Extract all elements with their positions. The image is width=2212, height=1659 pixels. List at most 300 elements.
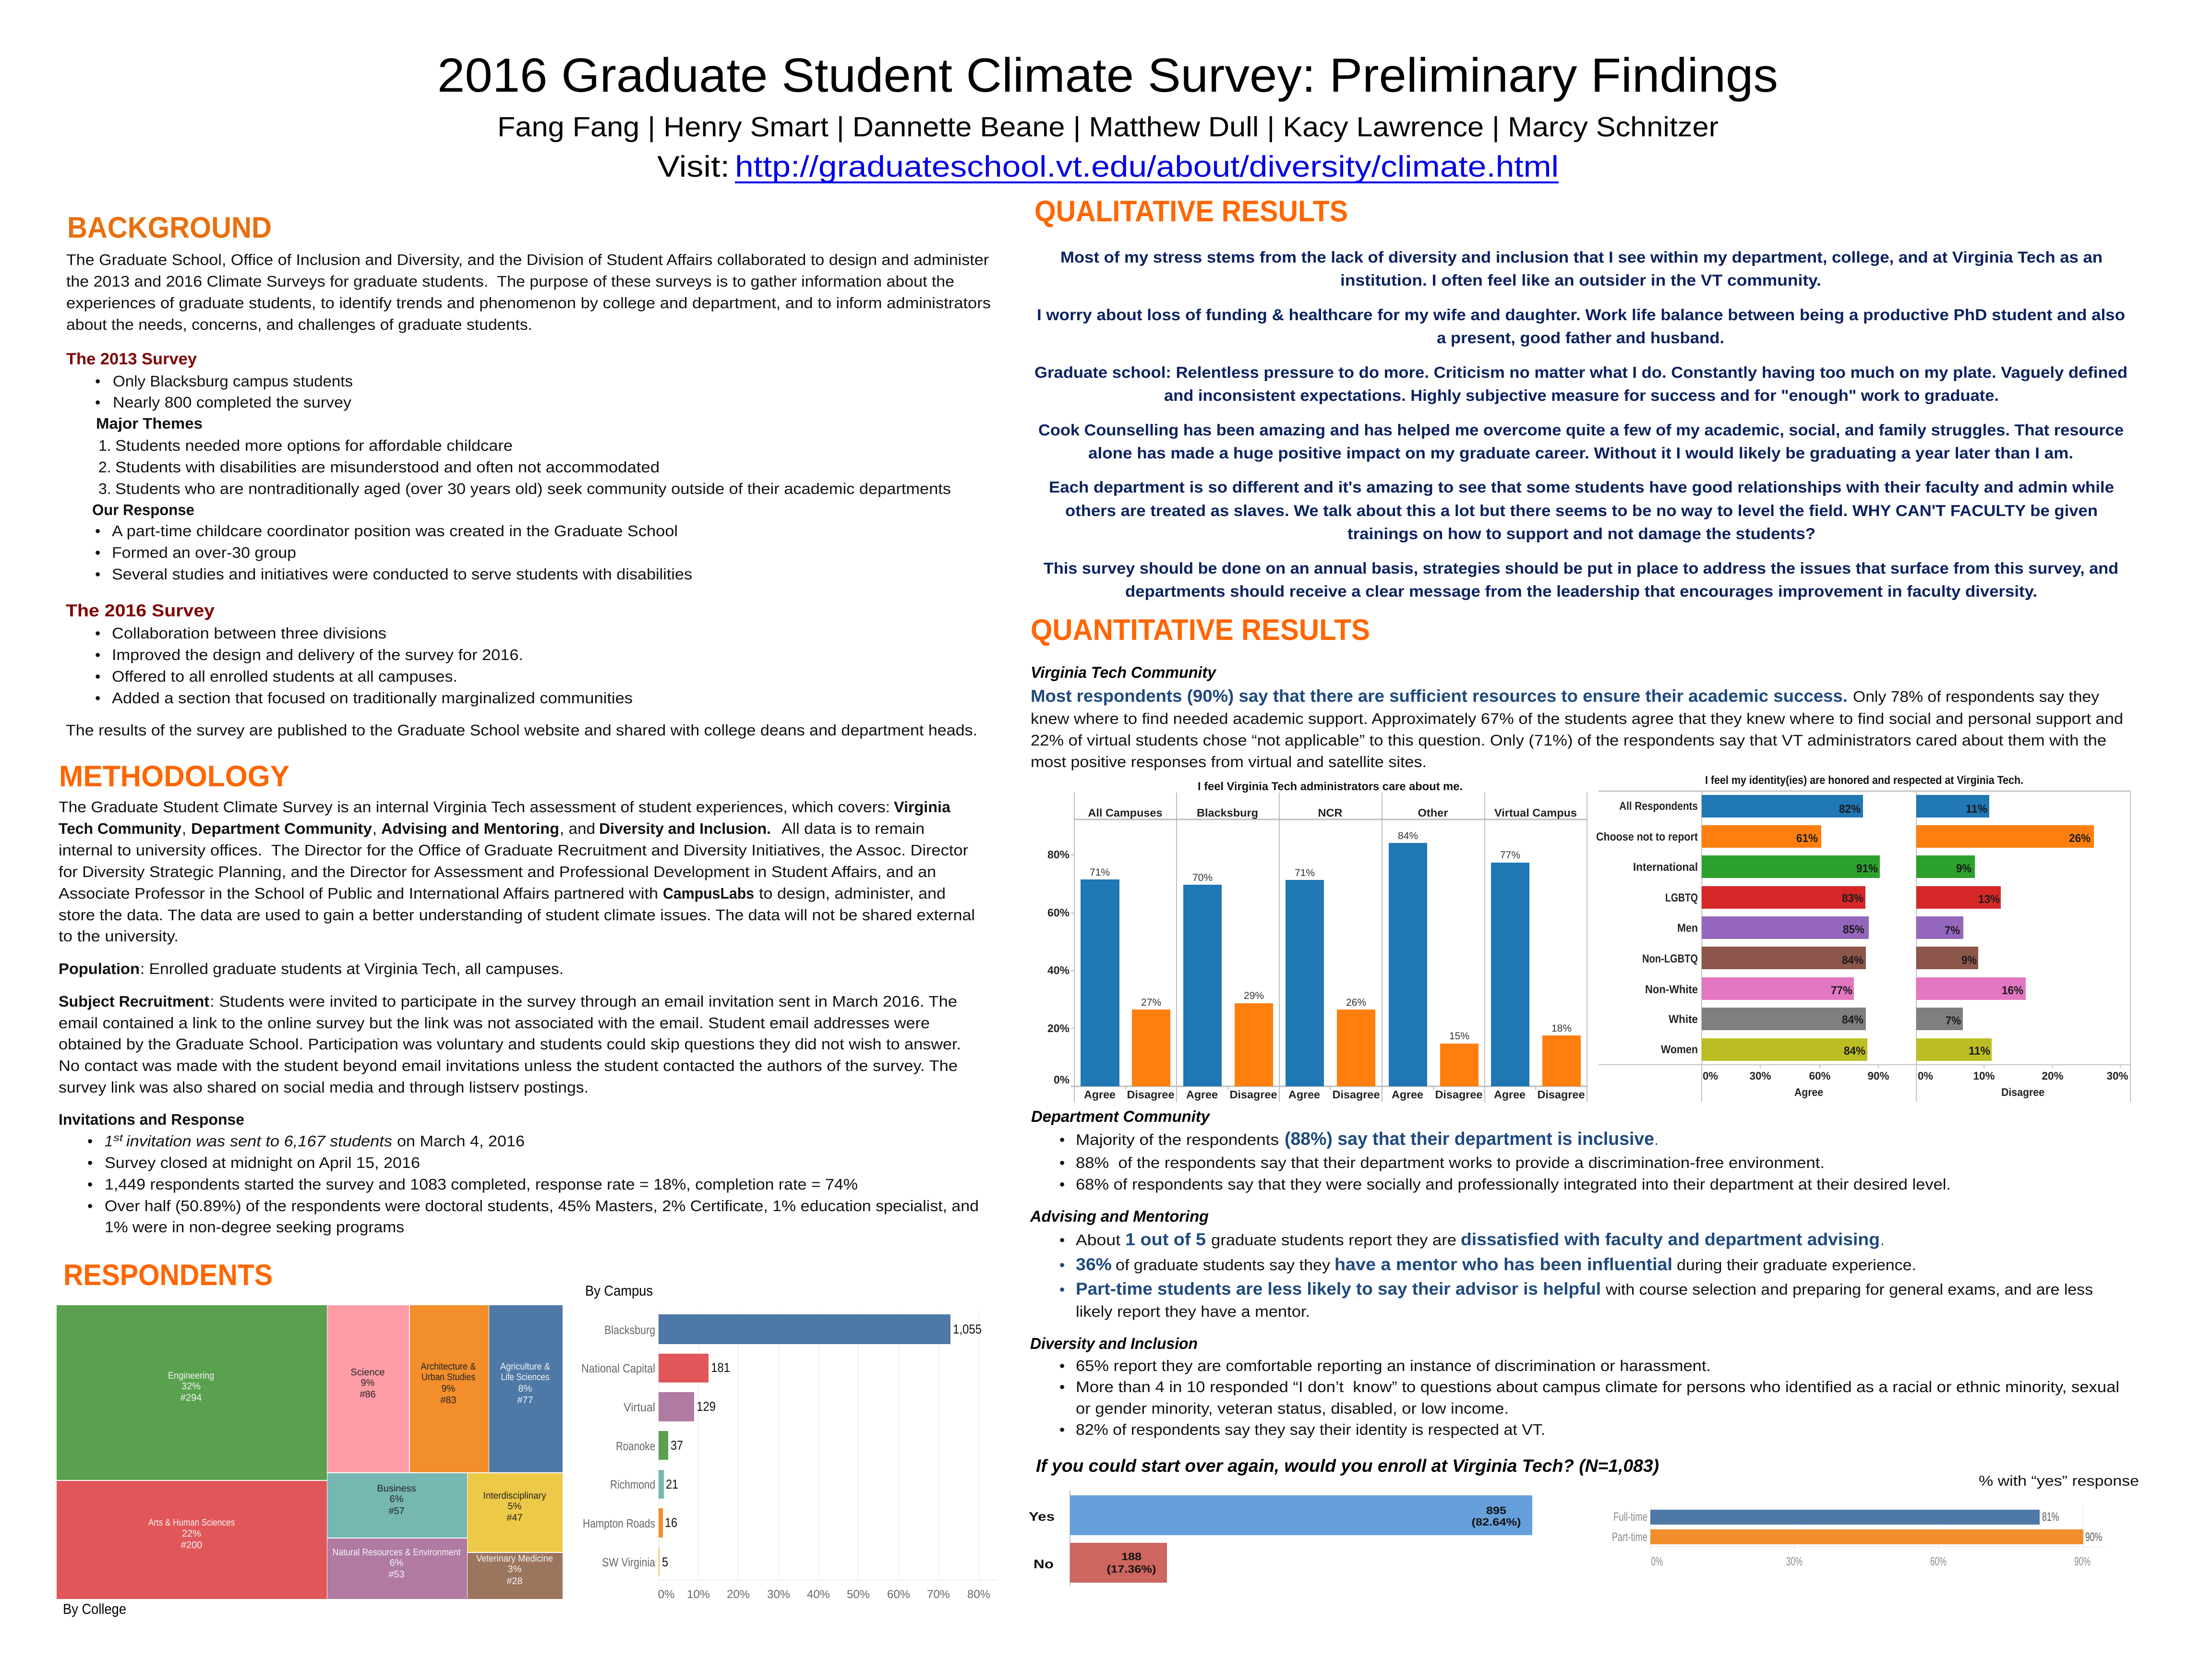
bar chart: identity respected: Men xyxy=(1677,922,1698,935)
bar chart: by campus: SW Virginia xyxy=(602,1556,655,1569)
advising and mentoring list: • xyxy=(1059,1256,1065,1274)
bar chart: administrators care: 80% xyxy=(1047,848,1070,861)
bar chart: administrators care: 71% xyxy=(1295,867,1315,878)
bar chart: by campus: 1,055 xyxy=(953,1322,982,1336)
architecture cell: 9% xyxy=(442,1383,456,1394)
bar chart: full-time and part-time: Part-time xyxy=(1612,1530,1647,1544)
veterinary medicine cell: 3% xyxy=(508,1564,522,1575)
bar chart: by campus: National Capital xyxy=(581,1362,655,1375)
quote 1 xyxy=(1060,248,2103,289)
diversity and inclusion list xyxy=(1059,1357,2119,1438)
caption: percent yes: % with “yes” response xyxy=(1979,1473,2139,1489)
advising and mentoring list: dissatisfied with faculty and department advising xyxy=(1461,1229,1880,1249)
header xyxy=(437,48,1778,183)
2013 survey list: • xyxy=(95,544,100,561)
methodology overview: Associate Professor in the School of Public and International Affairs partnered with xyxy=(59,885,658,902)
bar chart: identity respected: 26% xyxy=(2069,832,2091,845)
agriculture cell: 8% xyxy=(518,1383,532,1394)
bar chart: yes or no: 895 xyxy=(1486,1504,1506,1516)
subject recruitment text: survey link was also shared on social media and through listserv postings. xyxy=(59,1079,589,1096)
panel: respondents xyxy=(57,1259,998,1617)
bar chart: full-time and part-time: Full-time xyxy=(1613,1510,1647,1524)
population text: Population xyxy=(59,960,140,977)
methodology overview: Advising and Mentoring xyxy=(381,820,559,837)
subject recruitment text xyxy=(59,993,961,1096)
bar chart: administrators care: All Campuses xyxy=(1088,806,1163,819)
bar chart: full-time and part-time: 90% xyxy=(2074,1555,2091,1568)
diversity and inclusion list: 82% of respondents say they say their identity is respected at VT. xyxy=(1076,1421,1545,1438)
bar chart: by campus: Richmond xyxy=(610,1478,655,1491)
department community list xyxy=(1059,1129,1951,1193)
2013 survey list: 3. xyxy=(98,480,111,497)
bar chart: by campus: 60% xyxy=(887,1588,910,1601)
architecture cell: #83 xyxy=(440,1395,457,1406)
department community list: • xyxy=(1059,1131,1065,1148)
bar chart: identity respected: 20% xyxy=(2042,1070,2063,1082)
2013 survey list: Formed an over-30 group xyxy=(112,544,296,561)
department community list: Majority of the respondents xyxy=(1076,1131,1279,1148)
2013 survey list: Nearly 800 completed the survey xyxy=(113,394,351,411)
2016 survey list: Improved the design and delivery of the survey for 2016. xyxy=(112,646,523,663)
advising and mentoring list: . xyxy=(1880,1231,1885,1249)
bar chart: full-time and part-time: 81% xyxy=(2042,1510,2059,1524)
quote 4: Cook Counselling has been amazing and has helped me overcome quite a few of my academic, social, and family struggles. That resource xyxy=(1038,421,2124,439)
subject recruitment text: obtained by the Graduate School. Participation was voluntary and students could skip questions they did not wish to answer. xyxy=(59,1035,961,1053)
bar chart: by campus: 80% xyxy=(967,1588,990,1601)
diversity and inclusion list: • xyxy=(1059,1378,1065,1395)
methodology overview: , xyxy=(373,820,377,837)
bar chart: by campus: 30% xyxy=(767,1588,790,1601)
2013 survey list: 2. xyxy=(98,458,111,476)
bar chart: yes or no: No xyxy=(1034,1557,1054,1571)
bar chart: identity respected: 10% xyxy=(1973,1070,1995,1082)
2016 survey list: Collaboration between three divisions xyxy=(112,625,386,642)
bar chart: by campus: 0% xyxy=(658,1588,674,1601)
methodology overview: internal to university offices. The Director for the Office of Graduate Recruitment and Diversity Initiatives, the Assoc. Director xyxy=(59,842,968,859)
science cell xyxy=(327,1305,409,1472)
bar chart: identity respected: Agree xyxy=(1794,1086,1823,1098)
2013 survey list: • xyxy=(95,373,100,390)
subheading: 2016 survey: The 2016 Survey xyxy=(66,601,215,620)
science cell: #86 xyxy=(360,1389,376,1400)
bar chart: administrators care: Agree xyxy=(1186,1088,1218,1101)
agriculture cell xyxy=(489,1305,563,1472)
arts and human sciences cell xyxy=(57,1481,327,1599)
2016 survey list: • xyxy=(95,625,100,642)
advising and mentoring list: • xyxy=(1059,1281,1065,1298)
bar chart: administrators care: 26% xyxy=(1346,997,1366,1008)
subject recruitment text: : Students were invited to participate in the survey through an email invitation sent in March 2016. The xyxy=(210,993,957,1010)
2013 survey list: • xyxy=(95,565,100,583)
bar chart: identity respected: 13% xyxy=(1978,893,2000,906)
bar chart: administrators care: 70% xyxy=(1192,872,1213,883)
bar chart: identity respected: Choose not to report xyxy=(1596,830,1698,843)
quote 6 xyxy=(1044,559,2118,600)
bar chart: identity respected: 77% xyxy=(1831,984,1852,997)
background intro text: experiences of graduate students, to identify trends and phenomenon by college and department, and to inform administrators xyxy=(66,294,991,312)
virginia tech community text: Only 78% of respondents say they xyxy=(1853,688,2099,705)
quote 4: alone has made a huge positive impact on my graduate career. Without it I would likely be graduating a year later than I am. xyxy=(1088,444,2073,462)
2013 survey list: 1. xyxy=(98,437,111,454)
bar chart: yes or no: Yes xyxy=(1029,1509,1055,1524)
methodology overview: Diversity and Inclusion. xyxy=(599,820,771,837)
arts and human sciences cell: 22% xyxy=(182,1528,201,1539)
methodology overview: CampusLabs xyxy=(663,885,754,902)
heading: quantitative results: QUANTITATIVE RESULTS xyxy=(1031,613,1370,647)
engineering cell: 32% xyxy=(181,1381,201,1392)
quote 5: trainings on how to support and not damage the students? xyxy=(1347,525,1815,542)
quote 3 xyxy=(1034,363,2128,404)
invitations and response: • xyxy=(87,1132,93,1150)
invitations and response: st xyxy=(113,1132,123,1143)
chart title: I feel my identity(ies) are honored and respected at Virginia Tech. xyxy=(1705,774,2023,787)
natural resources cell: 6% xyxy=(390,1558,404,1568)
quote 3: Graduate school: Relentless pressure to do more. Criticism no matter what I do. Constantly having too much on my plate. Vaguely defined xyxy=(1034,363,2128,381)
bar chart: identity respected: 7% xyxy=(1945,924,1960,937)
bar chart: identity respected: 9% xyxy=(1961,954,1977,967)
2013 survey list: Students who are nontraditionally aged (over 30 years old) seek community outside of their academic departments xyxy=(115,480,951,497)
quote 2 xyxy=(1037,306,2125,347)
survey link: http://graduateschool.vt.edu/about/diversity/climate.html xyxy=(735,150,1559,183)
bar chart: identity respected: 91% xyxy=(1856,862,1878,875)
background intro text: the 2013 and 2016 Climate Surveys for graduate students. The purpose of these surveys is to gather information about the xyxy=(66,273,954,290)
subheading: diversity and inclusion: Diversity and Inclusion xyxy=(1030,1334,1198,1352)
department community list: 68% of respondents say that they were socially and professionally integrated into their department at their desired level. xyxy=(1076,1176,1951,1193)
quote 5: Each department is so different and it's amazing to see that some students have good relationships with their faculty and admin while xyxy=(1049,478,2114,496)
bar chart: identity respected: All Respondents xyxy=(1619,800,1698,813)
bar chart: by campus: 20% xyxy=(727,1588,750,1601)
bar chart: administrators care: Other xyxy=(1418,806,1448,819)
bar chart: administrators care: Agree xyxy=(1288,1088,1320,1101)
bar chart: identity respected: 90% xyxy=(1867,1070,1889,1082)
business cell: 6% xyxy=(390,1494,404,1504)
quote 3: and inconsistent expectations. Highly subjective measure for success and for "enough" work to graduate. xyxy=(1164,386,1999,404)
bar chart: by campus xyxy=(581,1310,998,1601)
subject recruitment text: Subject Recruitment xyxy=(59,993,209,1010)
bar chart: administrators care: Blacksburg xyxy=(1197,806,1258,819)
bar chart: identity respected xyxy=(1596,774,2130,1102)
bar chart: administrators care: Disagree xyxy=(1537,1088,1585,1101)
department community list: (88%) say that their department is inclusive xyxy=(1285,1129,1654,1149)
caption: by college: By College xyxy=(63,1601,126,1617)
subheading: advising and mentoring: Advising and Mentoring xyxy=(1030,1207,1209,1225)
department community list: • xyxy=(1059,1176,1065,1193)
quote 6: departments should receive a clear message from the leadership that encourages improvement in faculty diversity. xyxy=(1125,582,2037,600)
veterinary medicine cell xyxy=(468,1553,563,1599)
bar chart: identity respected: 0% xyxy=(1918,1070,1933,1082)
bar chart: identity respected: 84% xyxy=(1842,954,1863,967)
advising and mentoring list: with course selection and preparing for general exams, and are less xyxy=(1605,1281,2093,1298)
bar chart: administrators care xyxy=(1047,780,1587,1102)
bar chart: by campus: 50% xyxy=(847,1588,870,1601)
bar chart: identity respected: 60% xyxy=(1809,1070,1831,1082)
bar chart: identity respected: Women xyxy=(1661,1043,1698,1056)
bar chart: administrators care: 29% xyxy=(1244,990,1264,1001)
bar chart: identity respected: 16% xyxy=(2002,984,2023,997)
bar chart: identity respected: LGBTQ xyxy=(1665,891,1698,904)
2013 survey list: Only Blacksburg campus students xyxy=(113,373,353,390)
bar chart: identity respected: International xyxy=(1633,861,1698,874)
panel: quantitative results xyxy=(1029,613,2139,1586)
methodology overview: to the university. xyxy=(59,927,179,945)
bar chart: administrators care: 71% xyxy=(1090,867,1110,878)
bar chart: administrators care: 40% xyxy=(1047,964,1070,976)
bar chart: identity respected: 7% xyxy=(1946,1014,1961,1027)
bar chart: identity respected: 84% xyxy=(1842,1013,1863,1026)
interdisciplinary cell: #47 xyxy=(506,1513,523,1523)
architecture cell: Urban Studies xyxy=(421,1372,475,1382)
bar chart: identity respected: Non-White xyxy=(1645,983,1698,996)
bar chart: by campus: Hampton Roads xyxy=(583,1517,655,1530)
bar chart: identity respected: 11% xyxy=(1966,803,1987,816)
title: 2016 Graduate Student Climate Survey: Preliminary Findings xyxy=(437,48,1778,102)
2016 survey list: • xyxy=(95,689,100,707)
bar chart: administrators care: 60% xyxy=(1047,906,1070,919)
bar chart: yes or no: 188 xyxy=(1121,1551,1142,1563)
background intro text: about the needs, concerns, and challenges of graduate students. xyxy=(66,316,532,333)
engineering cell: #294 xyxy=(180,1393,202,1403)
bar chart: by campus: Blacksburg xyxy=(604,1323,655,1337)
panel: background xyxy=(66,211,991,739)
bar chart: administrators care: 15% xyxy=(1449,1031,1469,1042)
treemap: by college xyxy=(57,1305,563,1599)
bar chart: full-time and part-time: 60% xyxy=(1930,1555,1947,1568)
department community list: . xyxy=(1654,1131,1659,1148)
methodology overview: Tech Community xyxy=(59,820,181,837)
bar chart: administrators care: 0% xyxy=(1054,1073,1070,1086)
invitations and response: on March 4, 2016 xyxy=(397,1132,525,1150)
bar chart: full-time and part-time xyxy=(1612,1506,2106,1568)
2016 survey list: • xyxy=(95,668,100,685)
bar chart: identity respected: 83% xyxy=(1842,892,1863,905)
bar chart: by campus: 129 xyxy=(697,1399,716,1414)
bar chart: by campus: 181 xyxy=(711,1360,730,1375)
department community list: 88% of the respondents say that their department works to provide a discrimination-free environment. xyxy=(1076,1154,1825,1171)
diversity and inclusion list: or gender minority, veteran status, disabled, or low income. xyxy=(1076,1400,1509,1417)
2013 survey list: Students with disabilities are misunderstood and often not accommodated xyxy=(115,458,660,476)
methodology overview: All data is to remain xyxy=(781,820,925,837)
methodology overview xyxy=(59,798,975,945)
invitations and response: 1% were in non-degree seeking programs xyxy=(105,1218,404,1236)
advising and mentoring list: Part-time students are less likely to say their advisor is helpful xyxy=(1076,1279,1601,1298)
subject recruitment text: No contact was made with the student beyond email invitations unless the student contacted the authors of the survey. The xyxy=(59,1057,958,1074)
quote 1: institution. I often feel like an outsider in the VT community. xyxy=(1340,271,1821,289)
heading: background: BACKGROUND xyxy=(67,211,272,244)
2013 survey list: Major Themes xyxy=(96,415,203,432)
bar chart: administrators care: Agree xyxy=(1494,1088,1526,1101)
bar chart: administrators care: Agree xyxy=(1392,1088,1423,1101)
agriculture cell: Agriculture & xyxy=(500,1361,551,1372)
background intro text xyxy=(66,251,991,333)
invitations and response: • xyxy=(87,1197,93,1214)
advising and mentoring list: likely report they have a mentor. xyxy=(1076,1303,1310,1320)
2013 survey list: • xyxy=(95,522,100,540)
methodology overview: to design, administer, and xyxy=(759,885,946,902)
2013 survey list: • xyxy=(95,394,100,411)
invitations and response: 1,449 respondents started the survey and 1083 completed, response rate = 18%, completion rate = 74% xyxy=(105,1176,858,1193)
methodology overview: store the data. The data are used to gain a better understanding of student climate issues. The data will not be shared external xyxy=(59,906,975,924)
virginia tech community text: most positive responses from virtual and satellite sites. xyxy=(1031,753,1427,770)
subheading: 2013 survey: The 2013 Survey xyxy=(66,350,197,368)
bar chart: administrators care: NCR xyxy=(1318,806,1343,819)
bar chart: identity respected: 30% xyxy=(1749,1070,1771,1082)
bar chart: administrators care: Agree xyxy=(1084,1088,1116,1101)
quote 2: a present, good father and husband. xyxy=(1437,329,1724,347)
bar chart: administrators care: 77% xyxy=(1500,850,1520,861)
diversity and inclusion list: • xyxy=(1059,1357,1065,1374)
heading: qualitative results: QUALITATIVE RESULTS xyxy=(1034,195,1348,228)
science cell: Science xyxy=(350,1367,385,1378)
bar chart: by campus: 40% xyxy=(807,1588,830,1601)
bar chart: yes or no xyxy=(1029,1491,1532,1586)
bar chart: by campus: 37 xyxy=(671,1438,683,1453)
bar chart: identity respected: 61% xyxy=(1796,832,1818,845)
bar chart: yes or no: (82.64%) xyxy=(1472,1516,1521,1528)
diversity and inclusion list: 65% report they are comfortable reporting an instance of discrimination or harassment. xyxy=(1076,1357,1711,1374)
quote 6: This survey should be done on an annual basis, strategies should be put in place to address the issues that surface from this survey, and xyxy=(1044,559,2118,577)
business cell xyxy=(327,1473,467,1538)
natural resources cell xyxy=(327,1539,467,1599)
diversity and inclusion list: More than 4 in 10 responded “I don’t know” to questions about campus climate for persons who identified as a racial or ethnic minority, sexual xyxy=(1076,1378,2119,1395)
methodology overview: The Graduate Student Climate Survey is an internal Virginia Tech assessment of student experiences, which covers: xyxy=(59,798,890,816)
advising and mentoring list: 1 out of 5 xyxy=(1125,1229,1206,1249)
quote 5: others are treated as slaves. We talk about this a lot but there seems to be no way to level the field. WHY CAN'T FACULTY be given xyxy=(1065,502,2098,519)
methodology overview: for Diversity Strategic Planning, and the Director for Assessment and Professional Development in Student Affairs, and an xyxy=(59,863,936,880)
architecture cell xyxy=(410,1305,489,1472)
bar chart: identity respected: 82% xyxy=(1839,803,1861,816)
bar chart: administrators care: Disagree xyxy=(1230,1088,1277,1101)
2013 survey list xyxy=(92,373,951,583)
natural resources cell: #53 xyxy=(388,1569,405,1580)
bar chart: identity respected: Non-LGBTQ xyxy=(1642,952,1698,965)
bar chart: administrators care: Disagree xyxy=(1127,1088,1174,1101)
advising and mentoring list: during their graduate experience. xyxy=(1677,1256,1916,1274)
engineering cell xyxy=(57,1305,327,1480)
advising and mentoring list: 36% xyxy=(1076,1254,1112,1274)
bar chart: administrators care: 18% xyxy=(1551,1023,1572,1034)
bar chart: by campus: 10% xyxy=(687,1588,710,1601)
quote 5 xyxy=(1049,478,2114,542)
2013 survey list: Our Response xyxy=(92,501,194,518)
interdisciplinary cell xyxy=(468,1473,563,1552)
science cell: 9% xyxy=(361,1378,375,1388)
2013 survey list: Students needed more options for affordable childcare xyxy=(115,437,513,454)
2016 survey list: • xyxy=(95,646,100,663)
bar chart: administrators care: 27% xyxy=(1141,997,1161,1008)
bar chart: identity respected: 0% xyxy=(1703,1070,1718,1082)
invitations and response: • xyxy=(87,1176,93,1193)
heading: respondents: RESPONDENTS xyxy=(63,1259,273,1292)
panel: qualitative results xyxy=(1034,195,2128,600)
bar chart: by campus: 16 xyxy=(665,1515,677,1530)
bar chart: identity respected: 9% xyxy=(1956,862,1972,875)
advising and mentoring list: of graduate students say they xyxy=(1116,1256,1330,1274)
bar chart: administrators care: 20% xyxy=(1047,1022,1070,1034)
invitations and response: Over half (50.89%) of the respondents were doctoral students, 45% Masters, 2% Certificate, 1% education specialist, and xyxy=(105,1197,979,1214)
visit label: Visit: xyxy=(657,150,730,183)
virginia tech community text: knew where to find needed academic support. Approximately 67% of the students agree that they knew where to find social and personal support and xyxy=(1031,710,2123,727)
bar chart: identity respected: 85% xyxy=(1843,923,1864,936)
agriculture cell: #77 xyxy=(517,1395,533,1406)
bar chart: by campus: 5 xyxy=(662,1555,668,1569)
arts and human sciences cell: #200 xyxy=(181,1540,202,1551)
2016 survey list xyxy=(95,625,633,707)
virginia tech community text xyxy=(1031,686,2123,770)
diversity and inclusion list: • xyxy=(1059,1421,1065,1438)
authors: Fang Fang | Henry Smart | Dannette Beane | Matthew Dull | Kacy Lawrence | Marcy Schnitzer xyxy=(497,111,1719,143)
engineering cell: Engineering xyxy=(168,1370,214,1381)
chart title: I feel Virginia Tech administrators care about me. xyxy=(1198,780,1463,793)
business cell: Business xyxy=(377,1483,416,1494)
interdisciplinary cell: Interdisciplinary xyxy=(483,1491,546,1501)
agriculture cell: Life Sciences xyxy=(501,1372,549,1382)
natural resources cell: Natural Resources & Environment xyxy=(332,1547,461,1558)
business cell: #57 xyxy=(388,1506,405,1516)
subheading: virginia tech community: Virginia Tech Community xyxy=(1031,663,1217,681)
2013 survey list: Several studies and initiatives were conducted to serve students with disabilities xyxy=(112,565,692,583)
advising and mentoring list: • xyxy=(1059,1231,1065,1249)
quote 4 xyxy=(1038,421,2124,462)
methodology overview: Department Community xyxy=(191,820,372,837)
background closing text: The results of the survey are published to the Graduate School website and shared with college deans and department heads. xyxy=(66,721,977,739)
invitations and response: Invitations and Response xyxy=(59,1111,244,1128)
population text: : Enrolled graduate students at Virginia Tech, all campuses. xyxy=(140,960,564,977)
bar chart: administrators care: Virtual Campus xyxy=(1494,806,1577,819)
panel: methodology xyxy=(59,760,979,1236)
veterinary medicine cell: #28 xyxy=(506,1576,523,1587)
arts and human sciences cell: Arts & Human Sciences xyxy=(148,1517,235,1528)
invitations and response xyxy=(59,1111,979,1236)
bar chart: administrators care: Disagree xyxy=(1435,1088,1482,1101)
veterinary medicine cell: Veterinary Medicine xyxy=(476,1553,553,1564)
subheading: department community: Department Community xyxy=(1031,1107,1211,1125)
bar chart: by campus: 21 xyxy=(666,1477,678,1491)
bar chart: full-time and part-time: 0% xyxy=(1651,1555,1663,1568)
bar chart: by campus: Roanoke xyxy=(616,1440,655,1453)
methodology overview: Virginia xyxy=(894,798,950,816)
methodology overview: , xyxy=(182,820,186,837)
methodology overview: , and xyxy=(560,820,595,837)
bar chart: full-time and part-time: 30% xyxy=(1786,1555,1803,1568)
advising and mentoring list: graduate students report they are xyxy=(1211,1231,1456,1249)
invitations and response: invitation was sent to 6,167 students xyxy=(126,1132,392,1150)
virginia tech community text: 22% of virtual students chose “not applicable” to this question. Only (71%) of the respondents say that VT administrators cared about them with the xyxy=(1031,732,2106,749)
bar chart: by campus: Virtual xyxy=(624,1401,655,1414)
interdisciplinary cell: 5% xyxy=(508,1501,522,1512)
bar chart: identity respected: 11% xyxy=(1969,1045,1990,1058)
quote 1: Most of my stress stems from the lack of diversity and inclusion that I see within my department, college, and at Virginia Tech as an xyxy=(1060,248,2103,266)
department community list: • xyxy=(1059,1154,1065,1171)
2016 survey list: Offered to all enrolled students at all campuses. xyxy=(112,668,457,685)
bar chart: yes or no: (17.36%) xyxy=(1107,1563,1156,1575)
bar chart: administrators care: Disagree xyxy=(1333,1088,1380,1101)
bar chart: full-time and part-time: 90% xyxy=(2085,1530,2102,1544)
invitations and response: • xyxy=(87,1154,93,1171)
advising and mentoring list: About xyxy=(1076,1231,1120,1249)
heading: methodology: METHODOLOGY xyxy=(59,760,289,793)
virginia tech community text: Most respondents (90%) say that there are sufficient resources to ensure their academic success. xyxy=(1031,686,1848,706)
2013 survey list: A part-time childcare coordinator position was created in the Graduate School xyxy=(112,522,678,540)
bar chart: identity respected: 30% xyxy=(2106,1070,2128,1082)
background intro text: The Graduate School, Office of Inclusion and Diversity, and the Division of Student Affairs collaborated to design and administer xyxy=(66,251,989,268)
question: enroll again: If you could start over again, would you enroll at Virginia Tech? (N=1,083) xyxy=(1036,1456,1659,1476)
advising and mentoring list: have a mentor who has been influential xyxy=(1334,1254,1672,1274)
bar chart: identity respected: White xyxy=(1669,1013,1698,1026)
bar chart: administrators care: 84% xyxy=(1398,830,1418,842)
bar chart: by campus: 70% xyxy=(927,1588,950,1601)
advising and mentoring list xyxy=(1059,1229,2093,1320)
bar chart: identity respected: 84% xyxy=(1844,1045,1865,1058)
